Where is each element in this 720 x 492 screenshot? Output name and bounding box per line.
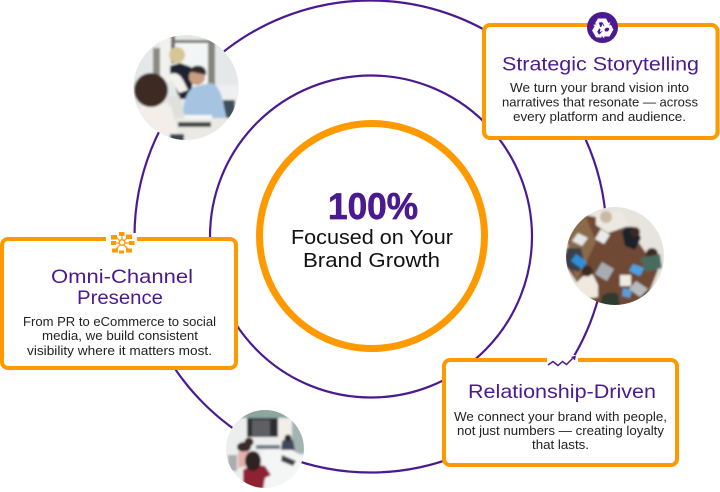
- icon: recycle badge: [587, 12, 618, 43]
- panel body text: that lasts.: [532, 438, 589, 452]
- panel body text: narratives that resonate — across: [502, 96, 698, 110]
- inner ring: [210, 76, 532, 398]
- panel title: Relationship-Driven: [468, 381, 656, 403]
- panel title: Strategic Storytelling: [502, 54, 699, 76]
- panel body text: We connect your brand with people,: [454, 410, 667, 424]
- panel body text: [502, 81, 698, 124]
- panel body text: visibility where it matters most.: [27, 344, 212, 358]
- central caption line 2: Brand Growth: [303, 250, 440, 272]
- outer ring: [134, 0, 606, 472]
- panel title: Presence: [77, 287, 163, 309]
- panel: strategic storytelling: [484, 12, 718, 138]
- panel title: Omni-Channel: [51, 266, 193, 288]
- panel title: [51, 266, 193, 309]
- icon: growth zigzag arrow: [547, 355, 578, 366]
- panel body text: media, we build consistent: [42, 329, 199, 343]
- central orange ring: [260, 124, 484, 348]
- panel body text: [23, 315, 216, 358]
- photo: overhead view of team table: [566, 207, 664, 305]
- panel body text: [454, 410, 667, 452]
- panel: omni-channel presence: [2, 232, 236, 368]
- panel body text: not just numbers — creating loyalty: [457, 424, 665, 438]
- photo: meeting room table: [226, 410, 304, 488]
- 100% figure: 100%: [328, 186, 418, 227]
- central text: [291, 186, 453, 272]
- panel body text: We turn your brand vision into: [510, 81, 689, 95]
- panel: relationship-driven: [444, 355, 677, 465]
- panel body text: From PR to eCommerce to social: [23, 315, 216, 329]
- panel body text: every platform and audience.: [513, 110, 686, 124]
- icon: network nodes: [106, 232, 137, 254]
- photo: office team around laptop: [134, 35, 238, 140]
- central caption line 1: Focused on Your: [291, 227, 453, 249]
